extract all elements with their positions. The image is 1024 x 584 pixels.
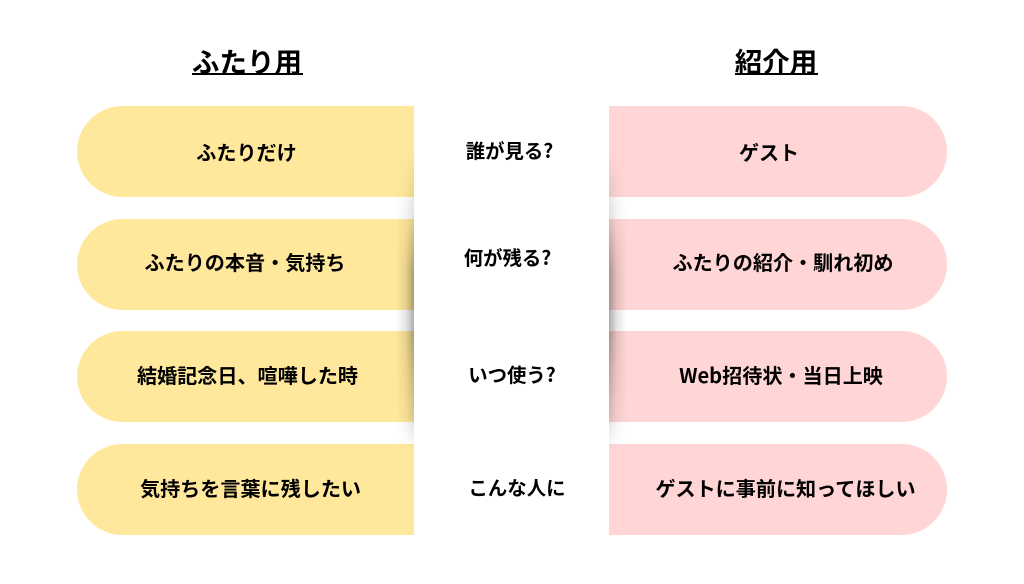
title: 紹介用: 紹介用	[735, 40, 817, 80]
panel: pink row 2	[609, 219, 947, 310]
panel: yellow row 2	[77, 219, 415, 310]
text: left row 3: 結婚記念日、喧嘩した時	[137, 360, 358, 389]
text: left row 4: 気持ちを言葉に残したい	[140, 473, 361, 502]
text: left row 1: ふたりだけ	[196, 137, 297, 166]
panel: pink row 4	[609, 444, 947, 535]
shadow left of center column	[399, 168, 414, 442]
text: center row 4: こんな人に	[469, 472, 565, 501]
text: center row 3: いつ使う?	[468, 359, 556, 388]
text: center row 2: 何が残る?	[464, 242, 551, 271]
text: left row 2: ふたりの本音・気持ち	[145, 247, 345, 276]
panel: pink row 3	[609, 331, 947, 422]
panel: yellow row 4	[77, 444, 415, 535]
text: center row 1: 誰が見る?	[466, 135, 553, 164]
text: right row 3: Web招待状・当日上映	[679, 360, 883, 389]
text: right row 2: ふたりの紹介・馴れ初め	[672, 247, 894, 276]
panel: pink row 1	[609, 106, 947, 197]
panel: yellow row 3	[77, 331, 415, 422]
title: ふたり用: ふたり用	[192, 40, 302, 80]
panel: yellow row 1	[77, 106, 415, 197]
shadow right of center column	[609, 168, 624, 442]
text: right row 4: ゲストに事前に知ってほしい	[655, 473, 916, 502]
text: right row 1: ゲスト	[739, 137, 799, 166]
panel: center column	[414, 90, 609, 550]
